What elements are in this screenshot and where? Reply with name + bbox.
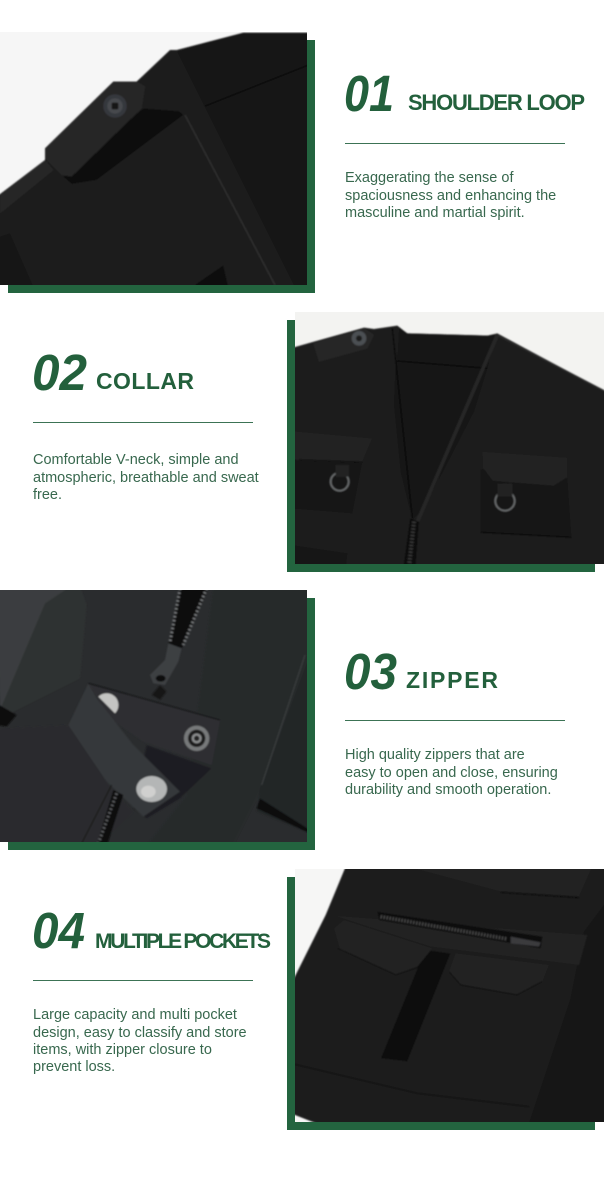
heading: 01 shoulder loop — [344, 65, 585, 122]
heading: 02 collar: 02 — [32, 344, 87, 401]
icon: left d-ring — [331, 473, 349, 491]
green offset frame 2 — [287, 320, 595, 572]
panel: multiple pockets — [287, 867, 604, 1130]
pocket gaps shadow — [381, 948, 451, 1062]
text block: zipper description: easy to open and close, ensuring — [345, 765, 558, 781]
text block: collar description: free. — [33, 487, 62, 503]
text block: zipper description — [345, 747, 558, 798]
photo: shoulder loop — [0, 32, 312, 290]
heading: 04 multiple pockets — [32, 902, 271, 959]
heading: 01 shoulder loop: 01 — [344, 65, 394, 122]
heading: 01 shoulder loop: SHOULDER LOOP — [408, 90, 585, 115]
text block: pockets description: design, easy to classify and store — [33, 1025, 247, 1041]
left pocket — [417, 948, 432, 969]
text block: collar description: Comfortable V-neck, simple and — [33, 452, 239, 468]
photo: multiple pockets — [291, 867, 604, 1128]
text block: zipper description: High quality zippers that are — [345, 747, 525, 763]
icon: right d-ring — [495, 491, 515, 511]
text block: shoulder loop description — [345, 170, 556, 221]
green offset frame 4 — [287, 877, 595, 1130]
icon: grommet — [184, 726, 209, 751]
text block: pockets description: items, with zipper closure to — [33, 1042, 212, 1058]
strap and snaps — [68, 683, 220, 818]
zipper — [377, 912, 542, 948]
text block: zipper description: durability and smooth operation. — [345, 782, 551, 798]
right pocket — [407, 953, 549, 1088]
icon: zipper puller — [150, 643, 182, 685]
text block: shoulder loop description: Exaggerating the sense of — [345, 170, 514, 186]
photo: collar — [291, 312, 604, 568]
icon: button — [352, 331, 366, 346]
icon: shoulder loop — [313, 328, 374, 362]
heading: 02 collar — [32, 344, 194, 401]
green offset frame 3 — [8, 598, 315, 850]
heading: 03 zipper: ZIPPER — [406, 667, 498, 693]
text block: pockets description — [33, 1007, 247, 1075]
text block: shoulder loop description: spaciousness and enhancing the — [345, 188, 556, 204]
text block: pockets description: prevent loss. — [33, 1059, 115, 1075]
heading: 04 multiple pockets: MULTIPLE POCKETS — [95, 930, 271, 953]
heading: 04 multiple pockets: 04 — [32, 902, 85, 959]
text block: pockets description: Large capacity and multi pocket — [33, 1007, 237, 1023]
heading: 03 zipper: 03 — [344, 643, 397, 700]
heading: 03 zipper — [344, 643, 498, 700]
icon: button — [103, 94, 127, 118]
panel: collar — [287, 312, 604, 572]
panel: shoulder loop — [0, 32, 315, 293]
green offset frame 1 — [8, 40, 315, 293]
text block: collar description: atmospheric, breathable and sweat — [33, 470, 259, 486]
text block: collar description — [33, 452, 259, 503]
text block: shoulder loop description: masculine and martial spirit. — [345, 205, 525, 221]
photo: zipper — [0, 585, 312, 847]
heading: 02 collar: COLLAR — [96, 368, 194, 394]
panel: zipper — [0, 585, 315, 850]
icon: silver snap — [136, 776, 167, 802]
